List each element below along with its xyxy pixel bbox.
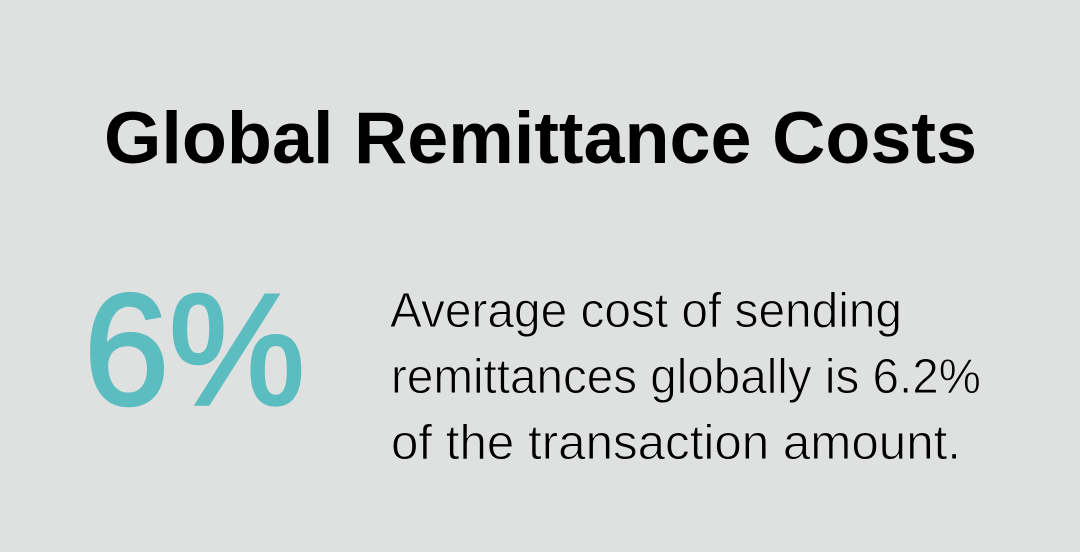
description text block: of the transaction amount. — [391, 416, 961, 470]
description text block: remittances globally is 6.2% — [391, 350, 981, 404]
big statistic: 6%: 6% — [84, 262, 305, 438]
description text block: Average cost of sending — [390, 284, 902, 338]
description text block — [390, 284, 981, 470]
title: Global Remittance Costs — [104, 98, 977, 179]
